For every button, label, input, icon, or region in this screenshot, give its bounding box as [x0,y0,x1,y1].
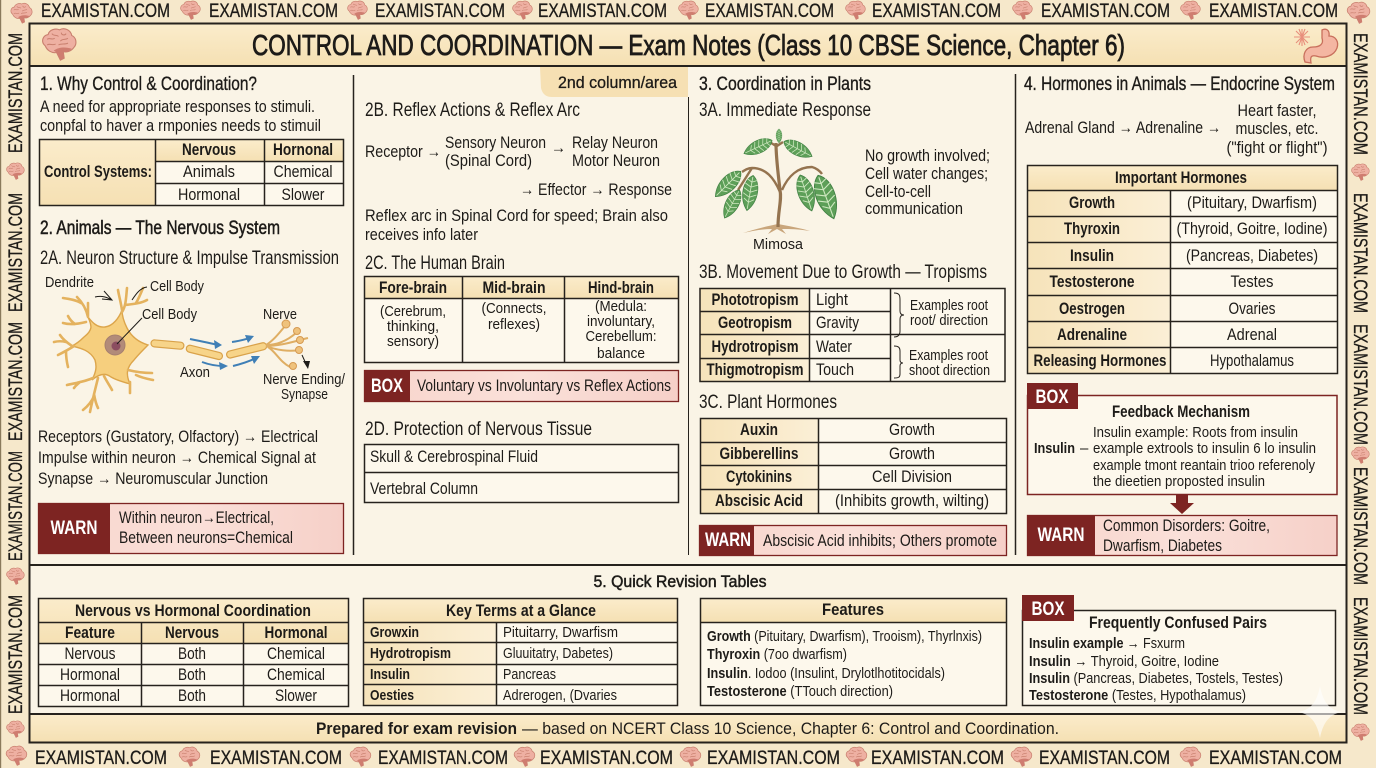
table: features: Growth (Pituitary, Dwarfism), Trooism), Thyrlnxis) [707,628,982,645]
callout: box feedback mechanism [1027,383,1337,494]
callout: warn neuron signals: WARN [50,518,98,539]
top border strip: EXAMISTAN.COM [41,1,170,22]
heading 1: 1. Why Control & Coordination? [40,74,257,95]
text: reflex note: receives info later [365,225,478,244]
text: immediate response notes [865,146,990,218]
callout: frequently confused pairs [1022,595,1336,706]
table: key terms: Insulin [370,666,410,683]
top border strip: EXAMISTAN.COM [872,1,1001,22]
table: important hormones: (Thyroid, Goitre, Iodine) [1176,219,1328,238]
table: tropisms: Touch [816,360,854,379]
table: important hormones: Oestrogen [1059,299,1125,318]
table: nervous vs hormonal: Hormonal [60,665,120,684]
table: important hormones: (Pituitary, Dwarfism) [1187,193,1317,212]
label: mimosa: Mimosa [753,236,804,253]
panel: column 4 hormones [1024,74,1338,556]
table: nervous vs hormonal: Both [178,644,206,663]
flow: reflex arc: Receptor → [365,142,441,161]
text: impulse pathway: Impulse within neuron → Chemical Signal at [38,448,316,467]
heading 5: 5. Quick Revision Tables [594,572,766,591]
callout: box feedback mechanism: example extrools to insulin 6 lo insulin [1093,440,1316,457]
text: immediate response notes: Cell water changes; [865,164,988,183]
callout: warn abscisic acid: Abscisic Acid inhibits; Others promote [763,531,997,550]
callout: warn disorders: Common Disorders: Goitre, [1103,516,1270,535]
table: human brain: thinking, [387,318,439,335]
callout: warn neuron signals: Between neurons=Chemical [119,528,293,547]
callout: box feedback mechanism: example tmont reantain trioo referenoly [1093,457,1315,474]
table: human brain: Mid-brain [482,278,546,297]
table: human brain: involuntary, [587,313,655,330]
table: tropisms: Thigmotropism [706,360,804,379]
diagram: neuron: Nerve [263,306,297,323]
table: important hormones: Testosterone [1050,272,1134,291]
table: important hormones: (Pancreas, Diabetes) [1186,246,1318,265]
table: key terms: Oesties [370,687,414,704]
table: control systems: Slower [282,185,325,204]
callout: box feedback mechanism: Feedback Mechanism [1112,402,1250,421]
callout: box voluntary: Voluntary vs Involuntary vs Reflex Actions [417,376,671,395]
callout: warn abscisic acid [699,525,1006,556]
table: nervous vs hormonal: Feature [65,623,115,642]
table: nervous vs hormonal: Nervous [165,623,219,642]
callout: warn neuron signals [38,503,344,554]
callout: box feedback mechanism: Insulin example: Roots from insulin [1093,424,1298,441]
diagram: neuron: Axon [180,364,210,381]
table: nervous vs hormonal: Chemical [267,665,325,684]
table: important hormones: Adrenaline [1057,325,1127,344]
left border strip: EXAMISTAN.COM [6,322,27,441]
flow: reflex arc [365,133,672,199]
left border strip: EXAMISTAN.COM [6,193,27,312]
callout: frequently confused pairs: BOX [1032,599,1065,620]
panel: column 3 plants [699,74,1006,556]
callout: box feedback mechanism: BOX [1036,387,1069,408]
table: important hormones: Growth [1069,193,1115,212]
text: impulse pathway [38,427,318,488]
left border strip: EXAMISTAN.COM [6,451,27,561]
table: important hormones [1028,166,1338,374]
icon: stomach and spark [1294,29,1338,63]
table: important hormones: Ovaries [1228,299,1276,318]
table: tropisms: Phototropism [712,290,798,309]
footer band [30,714,1346,742]
table: protection [364,444,678,502]
callout: box voluntary [364,370,678,402]
table: key terms: Growxin [370,624,419,641]
table: protection: Vertebral Column [370,479,478,498]
diagram: neuron: Cell Body [142,306,197,323]
table: key terms: Gluuitatry, Dabetes) [503,645,613,662]
flow: reflex arc: → Effector → Response [520,180,672,199]
callout: warn disorders: WARN [1038,525,1084,546]
panel: section 5 quick revision [38,572,1336,706]
flow: adrenaline: muscles, etc. [1236,119,1318,138]
table: nervous vs hormonal: Nervous vs Hormonal Coordination [75,601,311,620]
table: plant hormones: Cytokinins [726,467,792,486]
table: human brain: (Cerebrum, [380,303,446,320]
table: tropisms: Geotropism [718,313,792,332]
callout: frequently confused pairs: Frequently Confused Pairs [1089,613,1267,632]
table: human brain [364,276,678,362]
intro text [40,97,321,135]
table: nervous vs hormonal: Both [178,686,206,705]
heading 3A: 3A. Immediate Response [699,100,871,121]
table: plant hormones: Growth [889,420,935,439]
callout: frequently confused pairs: Insulin example → Fsxurm [1029,635,1185,652]
top border strip: EXAMISTAN.COM [538,1,667,22]
table: tropisms: Water [816,337,852,356]
flow: adrenaline [1025,101,1328,157]
table: control systems: Hornonal [273,140,333,159]
table: human brain: (Connects, [482,300,546,317]
table: features: Insulin. Iodoo (Insulint, Drylotlhotitocidals) [707,665,945,682]
right border strip: EXAMISTAN.COM [1349,193,1370,313]
callout: frequently confused pairs: Testosterone (Testes, Hypothalamus) [1029,687,1246,704]
table: features [700,598,1006,706]
text: immediate response notes: Cell-to-cell [865,182,931,201]
heading 3: 3. Coordination in Plants [699,74,871,95]
table: key terms: Key Terms at a Glance [446,601,596,620]
callout: box feedback mechanism: the dieetien proposted insulin [1093,473,1265,490]
table: human brain: Hind-brain [588,278,654,297]
top border strip: EXAMISTAN.COM [705,1,834,22]
table: nervous vs hormonal: Both [178,665,206,684]
flow: reflex arc: Motor Neuron [572,151,660,170]
table: plant hormones: Auxin [740,420,778,439]
table: important hormones: Releasing Hormones [1034,351,1166,370]
table: plant hormones: Growth [889,444,935,463]
table: nervous vs hormonal: Slower [275,686,317,705]
table: plant hormones: Abscisic Acid [715,491,803,510]
heading 3B: 3B. Movement Due to Growth — Tropisms [699,262,987,283]
heading 2C: 2C. The Human Brain [365,253,505,274]
icon: brain [43,29,76,60]
diagram: neuron: Nerve Ending/ [263,371,346,388]
intro text: conpfal to haver a rmponies needs to stimuil [40,116,321,135]
flow: reflex arc: Sensory Neuron [445,133,546,152]
top border strip: EXAMISTAN.COM [209,1,338,22]
text: reflex note [365,206,668,244]
right border strip: EXAMISTAN.COM [1349,597,1370,715]
bottom border strip [6,746,1342,768]
callout: warn neuron signals: Within neuron→Electrical, [119,508,274,527]
table: important hormones: Adrenal [1227,325,1277,344]
table: nervous vs hormonal: Nervous [64,644,116,663]
section 5 divider [30,564,1346,566]
heading 2D: 2D. Protection of Nervous Tissue [365,419,592,440]
table: control systems: Chemical [274,162,332,181]
title band [30,24,1346,66]
flow: adrenaline: ("fight or flight") [1226,138,1328,157]
table: control systems: Animals [183,162,235,181]
text: immediate response notes: communication [865,199,963,218]
left border strip [6,33,27,738]
table: nervous vs hormonal [38,598,348,706]
text: immediate response notes: No growth involved; [865,146,990,165]
title: CONTROL AND COORDINATION — Exam Notes (Class 10 CBSE Science, Chapter 6) [252,30,1125,62]
table: key terms [364,598,678,706]
table: tropisms: Examples root [910,297,989,314]
flow: adrenaline: Heart faster, [1238,101,1316,120]
table: nervous vs hormonal: Chemical [267,644,325,663]
table: control systems: Control Systems: [44,162,152,181]
heading 3C: 3C. Plant Hormones [699,392,837,413]
callout: warn disorders: Dwarfism, Diabetes [1103,536,1222,555]
footer band: Prepared for exam revision [316,719,517,738]
right border strip [1349,33,1370,740]
arrow: feedback to warn [1170,494,1194,514]
text: impulse pathway: Synapse → Neuromuscular Junction [38,469,268,488]
right border strip: EXAMISTAN.COM [1349,33,1370,155]
table: human brain: Fore-brain [379,278,447,297]
table: human brain: sensory) [387,333,439,350]
callout: warn disorders [1027,515,1337,556]
icon: sparkle [1298,686,1342,738]
table: human brain: (Medula: [595,298,647,315]
table: important hormones: Hypothalamus [1210,351,1294,370]
table: tropisms: shoot direction [909,362,990,379]
flow: adrenaline: Adrenal Gland → Adrenaline → [1025,118,1221,137]
top border strip [11,1,1370,23]
callout: frequently confused pairs: Insulin → Thyroid, Goitre, Iodine [1029,653,1219,670]
table: features: Features [822,600,884,619]
left border strip: EXAMISTAN.COM [6,595,27,714]
right border strip: EXAMISTAN.COM [1349,467,1370,585]
text: reflex note: Reflex arc in Spinal Cord for speed; Brain also [365,206,668,225]
diagram: neuron: Dendrite [45,274,94,291]
table: important hormones: Insulin [1070,246,1114,265]
table: nervous vs hormonal: Hormonal [264,623,328,642]
callout: warn abscisic acid: WARN [705,530,751,551]
table: human brain: balance [597,345,645,362]
table: nervous vs hormonal: Hormonal [60,686,120,705]
table: tropisms: Light [816,290,848,309]
table: important hormones: Important Hormones [1115,168,1247,187]
heading 2B: 2B. Reflex Actions & Reflex Arc [365,100,580,121]
table: features: Thyroxin (7oo dwarfism) [707,646,847,663]
table: features: Testosterone (TTouch direction) [707,683,893,700]
table: plant hormones [700,418,1006,514]
table: important hormones: Testes [1230,272,1274,291]
table: tropisms: Hydrotropism [712,337,798,356]
table: control systems: Nervous [182,140,236,159]
column dividers [354,74,1016,555]
table: key terms: Adrerogen, (Dvaries [503,687,617,704]
heading 2A: 2A. Neuron Structure & Impulse Transmission [40,248,339,269]
table: plant hormones: Gibberellins [720,444,798,463]
table: tropisms: Gravity [816,313,859,332]
callout: frequently confused pairs: Insulin (Pancreas, Diabetes, Tostels, Testes) [1029,670,1283,687]
callout: box feedback mechanism: Insulin [1034,440,1075,457]
callout: box feedback mechanism: – [1080,440,1089,457]
table: plant hormones: Cell Division [872,467,952,486]
heading 2: 2. Animals — The Nervous System [40,218,280,239]
callout: box voluntary: BOX [371,376,403,397]
right border strip: EXAMISTAN.COM [1349,324,1370,445]
table: control systems: Hormonal [178,185,240,204]
diagram: neuron [45,274,346,412]
diagram: neuron: Cell Body [150,278,204,295]
table: human brain: Cerebellum: [586,328,656,345]
table: key terms: Hydrotropism [370,645,451,662]
panel: column 2 [364,67,688,502]
flow: reflex arc: (Spinal Cord) [445,151,532,170]
tab: 2nd column/area: 2nd column/area [558,73,678,92]
table: plant hormones: (Inhibits growth, wilting) [835,491,989,510]
table: tropisms: Examples root [909,347,989,364]
diagram: neuron: Synapse [281,386,328,403]
table: human brain: reflexes) [488,316,540,333]
table: key terms: Pancreas [503,666,556,683]
intro text: A need for appropriate responses to stimuli. [40,97,315,116]
top border strip: EXAMISTAN.COM [375,1,505,22]
table: tropisms: root/ direction [910,312,988,329]
icon: mimosa plant [710,129,843,234]
tab: 2nd column/area [540,67,688,97]
table: protection: Skull & Cerebrospinal Fluid [370,447,538,466]
footer band: — based on NCERT Class 10 Science, Chapter 6: Control and Coordination. [522,719,1059,738]
text: impulse pathway: Receptors (Gustatory, Olfactory) → Electrical [38,427,318,446]
table: control systems [40,140,344,206]
table: important hormones: Thyroxin [1064,219,1120,238]
top border strip: EXAMISTAN.COM [1209,1,1338,22]
table: key terms: Pituitarry, Dwarfism [503,624,618,641]
table: tropisms [700,288,1005,382]
flow: reflex arc: Relay Neuron [572,133,658,152]
panel: column 1 why control [40,74,344,206]
flow: reflex arc: → [551,138,566,157]
panel: animals nervous system [38,218,346,554]
top border strip: EXAMISTAN.COM [1041,1,1170,22]
